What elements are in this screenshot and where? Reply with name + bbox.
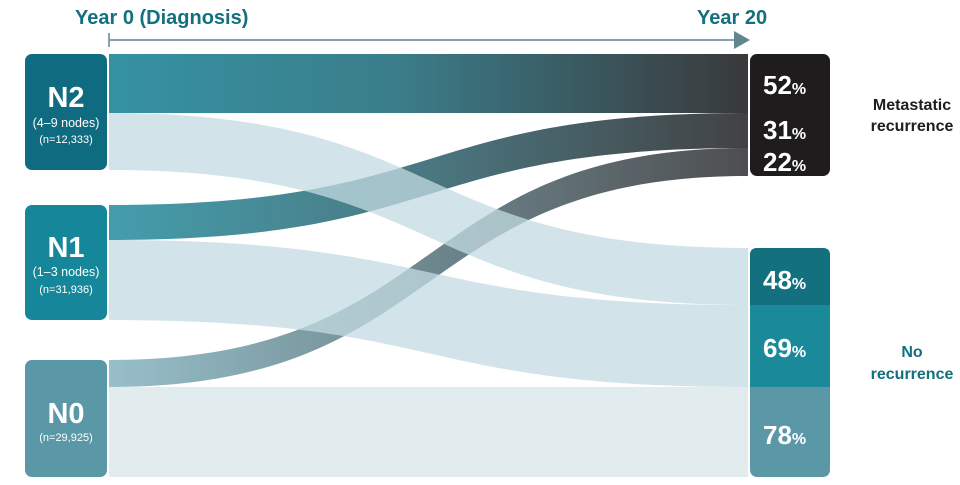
box: N2: (n=12,333): [39, 134, 93, 146]
flow: N0 metastatic: [109, 148, 748, 387]
heading: Year 0: Year 0 (Diagnosis): [75, 7, 248, 29]
box: no recurrence percentages: 69%: [763, 333, 806, 363]
label: no recurrence: No: [901, 344, 923, 361]
flow: N2 no recurrence: [109, 113, 748, 305]
box: N1: [25, 205, 107, 320]
box: no recurrence percentages: 48%: [763, 265, 806, 295]
box: N2: [25, 54, 107, 170]
label: no recurrence: recurrence: [871, 366, 953, 383]
box: metastatic percentages: [750, 54, 830, 177]
box: no recurrence percentages: [750, 248, 830, 477]
label: metastatic recurrence: Metastatic: [873, 97, 951, 114]
box: N0: N0: [47, 398, 85, 430]
arrow: timeline: [109, 31, 750, 49]
box: N1: N1: [47, 232, 85, 264]
flow: N1 no recurrence: [109, 240, 748, 387]
flow: N0 no recurrence: [109, 387, 748, 477]
box: N2: (4–9 nodes): [33, 116, 99, 130]
box: metastatic percentages: 52%: [763, 70, 806, 100]
box: N0: (n=29,925): [39, 432, 93, 444]
box: metastatic percentages: 22%: [763, 147, 806, 177]
heading: Year 20: Year 20: [697, 7, 767, 29]
label: metastatic recurrence: recurrence: [871, 118, 953, 135]
box: N1: (n=31,936): [39, 284, 93, 296]
box: N0: [25, 360, 107, 477]
box: metastatic percentages: 31%: [763, 115, 806, 145]
flow: N2 metastatic: [109, 54, 748, 113]
label: metastatic recurrence: [871, 97, 953, 135]
box: N2: N2: [47, 82, 85, 114]
flow: N1 metastatic: [109, 113, 748, 240]
label: no recurrence: [871, 344, 953, 383]
box: N1: (1–3 nodes): [33, 265, 99, 279]
box: no recurrence percentages: 78%: [763, 420, 806, 450]
